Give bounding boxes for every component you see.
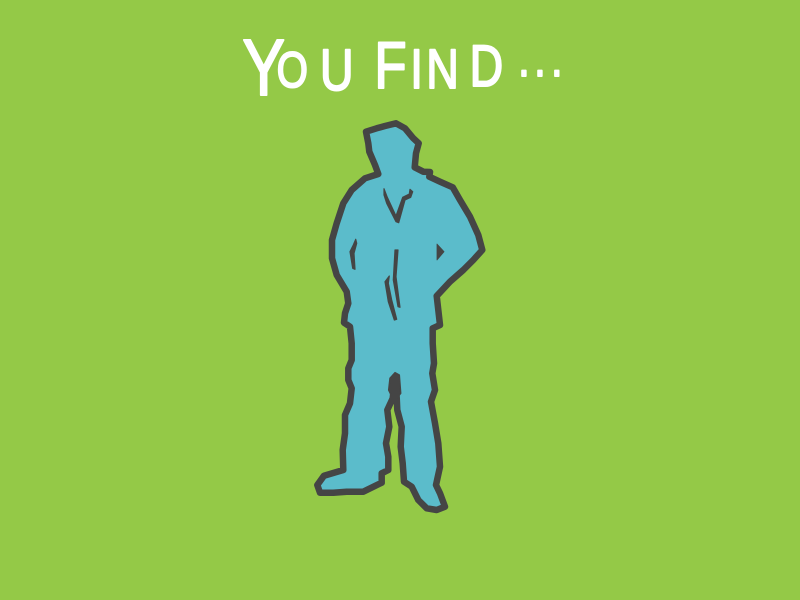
left pocket [350,239,357,269]
lower fold [385,276,397,320]
crotch shadow [389,373,401,398]
silhouette body outline [317,123,482,510]
title: You find...: I [410,37,423,100]
title: You find...: . [534,31,546,87]
right arm gap [437,244,444,260]
figure: standing man silhouette [317,123,482,510]
collar [384,189,413,223]
title: You find...: . [551,31,562,87]
title: You find...: . [518,31,530,87]
centre fold [393,250,400,307]
title: You find...: U [320,38,366,103]
title: You find...: Y [242,23,285,113]
title: You find...: O [277,42,308,98]
title: You find...: N [426,37,459,100]
title: You find...: F [374,28,407,102]
title: You find...: D [470,34,503,99]
